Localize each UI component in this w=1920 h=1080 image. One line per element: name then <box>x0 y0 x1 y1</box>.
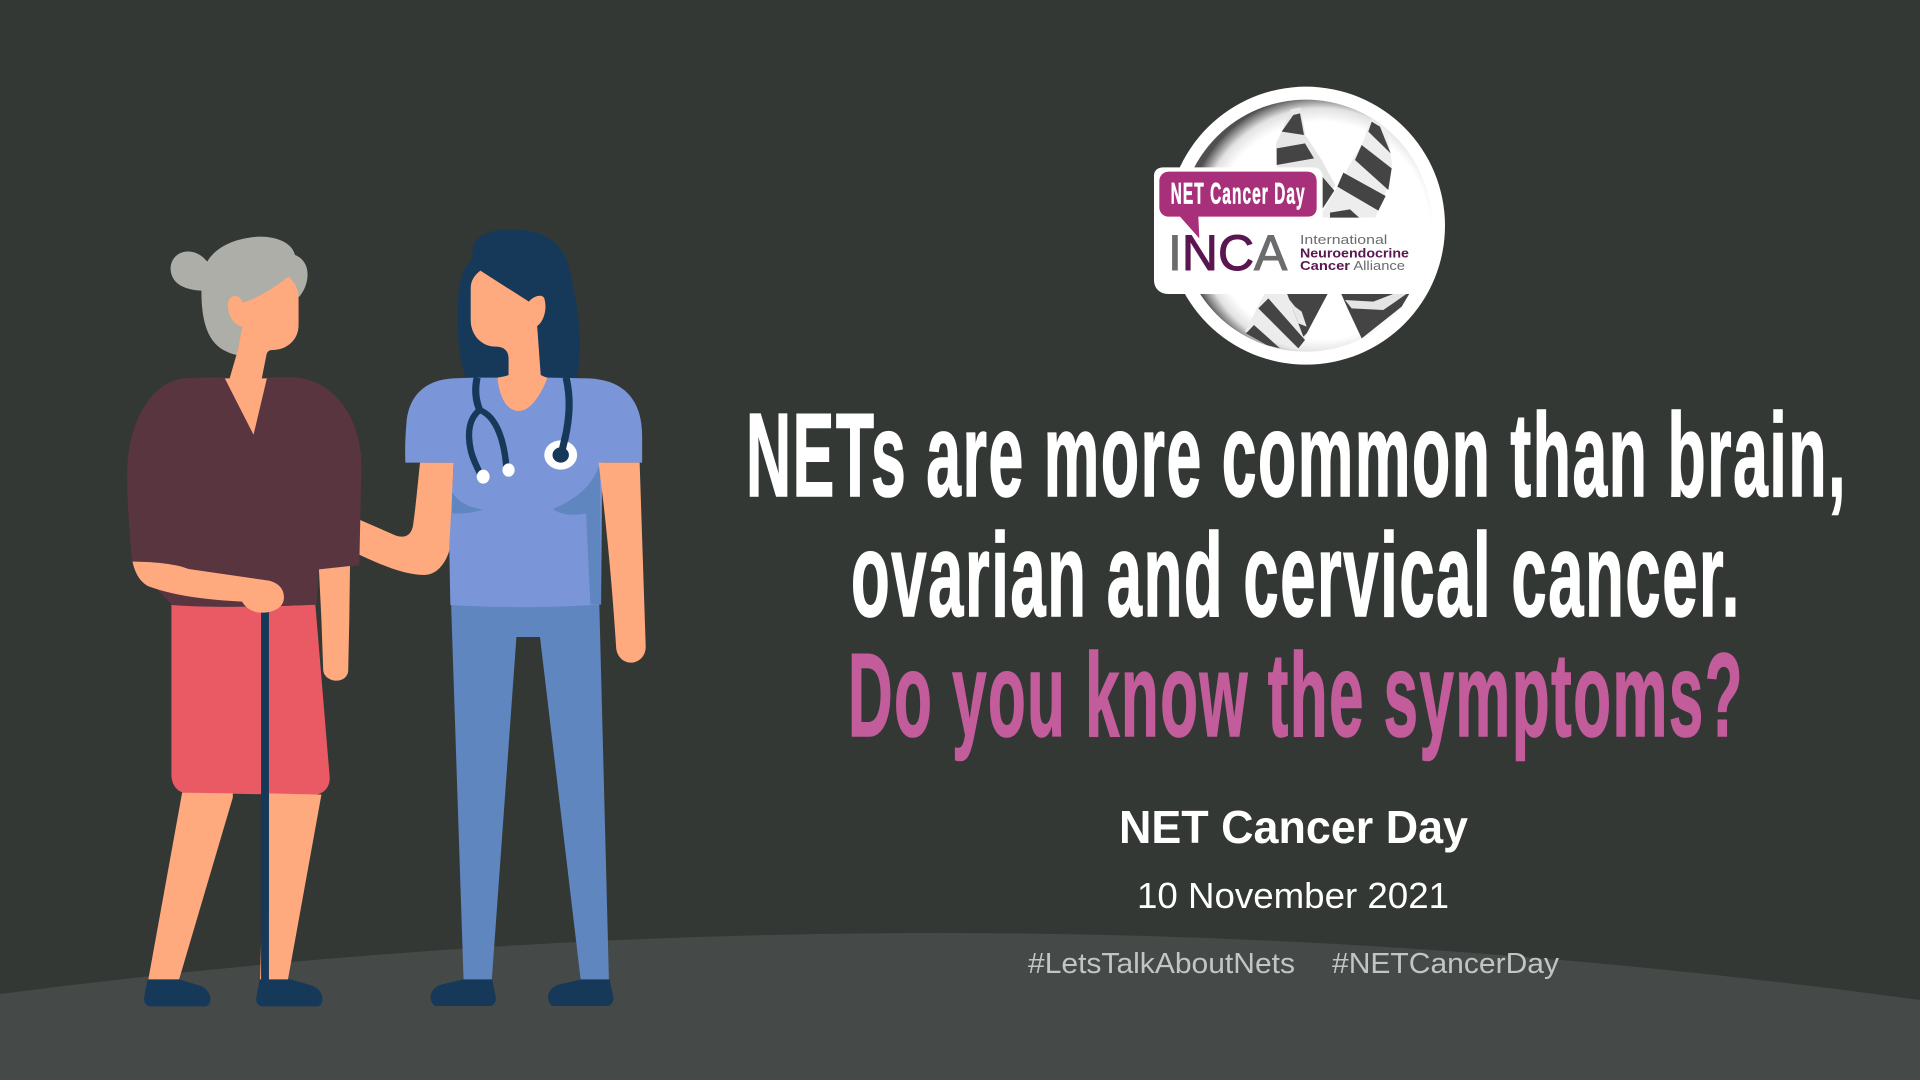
hair and bun <box>171 237 308 355</box>
nurse face and neck <box>471 271 547 411</box>
nurse left shoe <box>431 979 496 1006</box>
nurse right arm <box>599 463 646 663</box>
hashtag 1: #LetsTalkAboutNets <box>1028 948 1295 980</box>
stethoscope <box>469 378 577 484</box>
nurse right shoe <box>548 979 613 1006</box>
white band <box>1154 167 1432 294</box>
bubble label: NET Cancer Day <box>1171 177 1306 210</box>
face and neck <box>224 277 299 435</box>
event name: NET Cancer Day <box>1119 801 1468 853</box>
alliance name line 1: International <box>1300 233 1387 247</box>
badge outer ring <box>1167 87 1445 365</box>
figure: elderly woman with cane <box>127 237 454 1006</box>
nurse hair <box>457 229 580 380</box>
zebra ribbon <box>1245 107 1410 350</box>
figure: nurse with stethoscope <box>405 229 646 1006</box>
event date: 10 November 2021 <box>1137 875 1449 916</box>
left leg <box>148 793 233 980</box>
alliance name line 3: Cancer Alliance <box>1300 259 1405 273</box>
scrub top <box>405 378 642 607</box>
left shoe <box>144 979 210 1006</box>
illustration: elderly patient and nurse <box>127 229 646 1006</box>
forearm and hand <box>132 562 284 613</box>
ground hill <box>0 933 1920 1080</box>
badge inner disc <box>1180 100 1432 352</box>
speech bubble <box>1159 172 1317 238</box>
INCA wordmark: INCA <box>1168 225 1288 281</box>
shirt <box>127 377 361 607</box>
skirt <box>171 604 330 795</box>
headline <box>746 389 1847 762</box>
right shoe <box>256 979 323 1006</box>
right arm <box>319 566 350 681</box>
hashtag 2: #NETCancerDay <box>1332 948 1560 980</box>
side shading left <box>452 493 483 513</box>
right leg <box>260 793 321 980</box>
scrub trousers <box>451 603 609 980</box>
logo: NET Cancer Day / INCA badge <box>1154 87 1445 365</box>
cane <box>261 610 269 981</box>
nurse supporting arm <box>356 463 454 575</box>
alliance name line 2: Neuroendocrine <box>1300 246 1409 260</box>
side shading right <box>553 467 601 604</box>
